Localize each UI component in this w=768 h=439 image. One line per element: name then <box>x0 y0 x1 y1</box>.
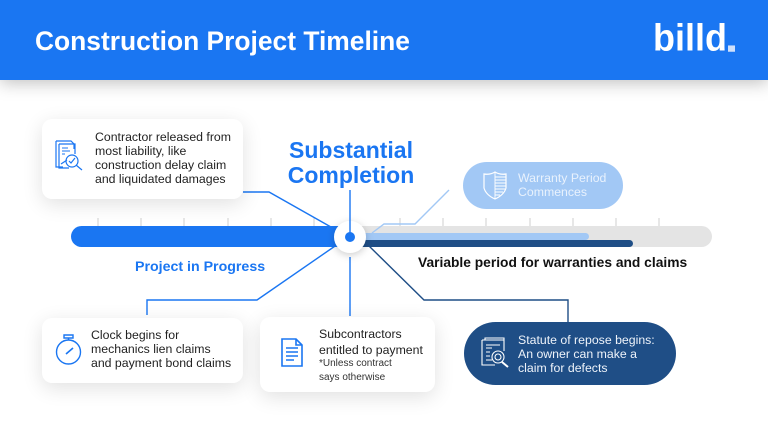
text: Warranty Period <box>518 171 606 185</box>
heading: substantial completion <box>288 137 414 188</box>
connector: warranty <box>372 190 449 233</box>
label: project in progress: Project in Progress <box>135 259 265 275</box>
footnote: *Unless contract <box>319 358 392 369</box>
text <box>91 328 231 370</box>
text: mechanics lien claims <box>91 342 211 356</box>
text: Commences <box>518 185 587 199</box>
footnote <box>319 358 392 382</box>
icon: stopwatch <box>56 334 82 365</box>
panel: clock begins <box>42 318 243 383</box>
icon: document magnifier <box>481 338 509 368</box>
text: most liability, like <box>95 144 186 158</box>
text: Subcontractors <box>319 327 402 341</box>
text: and payment bond claims <box>91 356 231 370</box>
header banner <box>0 0 768 80</box>
connector: statute of repose <box>368 245 568 322</box>
title: Construction Project Timeline <box>35 26 410 56</box>
text: Clock begins for <box>91 328 179 342</box>
icon: document check <box>55 140 82 170</box>
text: Contractor released from <box>95 130 231 144</box>
panel: warranty period pill <box>463 162 623 209</box>
text <box>518 333 655 375</box>
text: Statute of repose begins: <box>518 333 655 347</box>
icon: document <box>281 338 303 367</box>
connector: subcontractors <box>349 257 351 316</box>
text: construction delay claim <box>95 158 226 172</box>
text: and liquidated damages <box>95 172 226 186</box>
heading: substantial completion: Completion <box>288 162 414 188</box>
text: An owner can make a <box>518 347 637 361</box>
panel: statute of repose pill <box>464 322 676 385</box>
node: substantial completion marker <box>334 190 366 253</box>
panel: subcontractors <box>260 317 435 392</box>
label: variable period: Variable period for warranties and claims <box>418 255 687 270</box>
panel: contractor released <box>42 119 243 199</box>
logo: billd <box>653 16 727 59</box>
connector: contractor released <box>243 192 338 231</box>
text <box>518 171 606 199</box>
text <box>95 130 231 186</box>
dark blue bar: claims period <box>350 240 633 247</box>
light blue bar: warranty period <box>350 233 589 240</box>
grey bar: variable period track <box>340 226 712 247</box>
text: entitled to payment <box>319 343 423 357</box>
text <box>319 327 423 357</box>
blue bar: project in progress <box>71 226 356 247</box>
icon: shield <box>483 171 507 200</box>
text: claim for defects <box>518 361 608 375</box>
footnote: says otherwise <box>319 372 385 382</box>
connector: clock begins <box>147 244 338 315</box>
heading: substantial completion: Substantial <box>289 137 413 163</box>
